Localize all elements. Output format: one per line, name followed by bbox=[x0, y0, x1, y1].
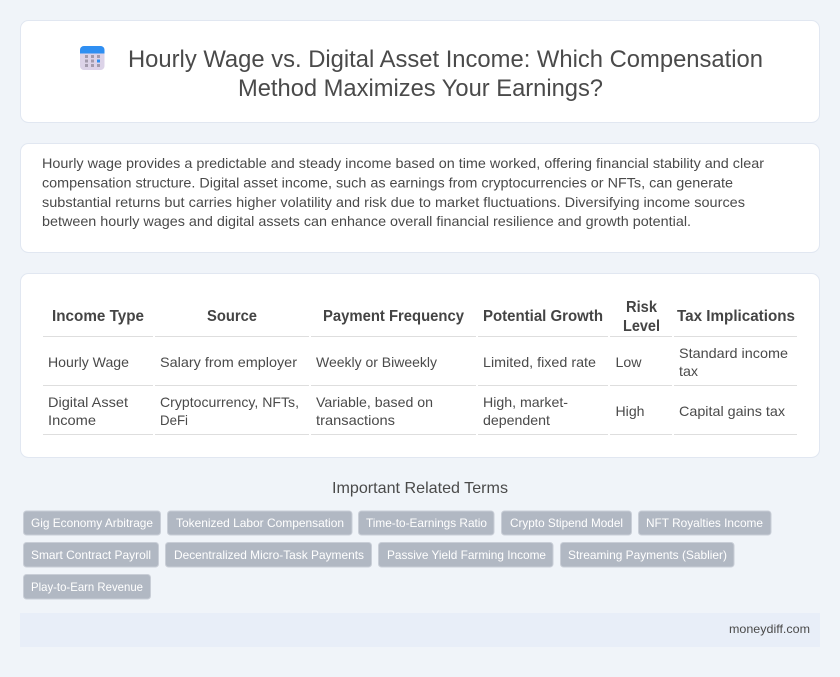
text block: summary: substantial returns but carries higher volatility and risk due to market fluctuations. Diversifying income sources bbox=[42, 194, 745, 210]
table row: digital asset income: Income bbox=[48, 412, 96, 428]
tag: smart contract payroll bbox=[24, 542, 158, 567]
tag: nft royalties income: NFT Royalties Income bbox=[646, 516, 763, 530]
tag: smart contract payroll: Smart Contract Payroll bbox=[31, 548, 151, 562]
table header row: Risk bbox=[626, 299, 657, 316]
text block: summary bbox=[42, 155, 764, 229]
table header row bbox=[52, 299, 795, 335]
tag: decentralized micro-task payments bbox=[166, 542, 372, 567]
table row: hourly wage: Hourly Wage bbox=[48, 354, 129, 370]
tag: time-to-earnings ratio bbox=[358, 511, 494, 535]
heading: important related terms: Important Related Terms bbox=[332, 480, 508, 497]
table row: digital asset income: transactions bbox=[316, 412, 395, 428]
tag: streaming payments: Streaming Payments (Sablier) bbox=[568, 548, 727, 562]
tag: passive yield farming income bbox=[378, 542, 553, 567]
title: Hourly Wage vs. Digital Asset Income: Which Compensation bbox=[128, 46, 763, 73]
tag: nft royalties income bbox=[638, 511, 771, 535]
tag: passive yield farming income: Passive Yield Farming Income bbox=[387, 548, 546, 562]
table row: digital asset income: DeFi bbox=[160, 412, 188, 428]
table row: digital asset income: Cryptocurrency, NFTs, bbox=[160, 394, 299, 410]
table row: hourly wage: Weekly or Biweekly bbox=[316, 354, 437, 370]
table header row: Income Type bbox=[52, 308, 144, 325]
table header row: Level bbox=[623, 318, 660, 335]
panel: comparison table bbox=[20, 274, 820, 458]
text block: summary: compensation structure. Digital asset income, such as earnings from cryptocurrencies or NFTs, can generate bbox=[42, 174, 733, 190]
table row: digital asset income: dependent bbox=[483, 412, 550, 428]
title bbox=[128, 46, 763, 102]
table row: hourly wage: Limited, fixed rate bbox=[483, 354, 596, 370]
tag: streaming payments bbox=[560, 542, 734, 567]
tag: crypto stipend model: Crypto Stipend Model bbox=[510, 516, 623, 530]
table row: digital asset income: Variable, based on bbox=[316, 394, 433, 410]
table header row: Payment Frequency bbox=[323, 308, 464, 325]
icon: calendar bbox=[80, 46, 104, 70]
table row: digital asset income: Capital gains tax bbox=[679, 403, 785, 419]
panel: summary paragraph bbox=[20, 144, 820, 252]
tag: gig economy arbitrage bbox=[24, 511, 160, 535]
tag: gig economy arbitrage: Gig Economy Arbitrage bbox=[31, 516, 153, 530]
tag: tokenized labor compensation: Tokenized Labor Compensation bbox=[176, 516, 344, 530]
footer bar: moneydiff.com bbox=[729, 622, 810, 636]
tag: time-to-earnings ratio: Time-to-Earnings Ratio bbox=[366, 516, 487, 530]
title: Method Maximizes Your Earnings? bbox=[238, 75, 603, 102]
tag: decentralized micro-task payments: Decentralized Micro-Task Payments bbox=[174, 548, 364, 562]
table row: digital asset income: Digital Asset bbox=[48, 394, 128, 410]
text block: summary: between hourly wages and digital assets can enhance overall financial resilience and growth potential. bbox=[42, 213, 691, 229]
table row: digital asset income bbox=[48, 394, 785, 428]
text block: summary: Hourly wage provides a predictable and steady income based on time worked, offering financial stability and clear bbox=[42, 155, 764, 171]
footer bar bbox=[20, 613, 820, 647]
table row: digital asset income: High bbox=[616, 403, 644, 419]
tag: play-to-earn revenue: Play-to-Earn Revenue bbox=[31, 580, 143, 594]
table row: hourly wage: Standard income bbox=[679, 345, 788, 361]
table header row: Source bbox=[207, 308, 257, 325]
table header row: Potential Growth bbox=[483, 308, 603, 325]
tag: play-to-earn revenue bbox=[24, 574, 150, 599]
table row: hourly wage: tax bbox=[679, 363, 698, 379]
table row: hourly wage: Low bbox=[616, 354, 642, 370]
tag: tokenized labor compensation bbox=[168, 511, 352, 535]
tag list: related terms bbox=[24, 511, 771, 599]
tag: crypto stipend model bbox=[502, 511, 632, 535]
table row: digital asset income: High, market- bbox=[483, 394, 568, 410]
panel: title card bbox=[20, 20, 820, 122]
table row: hourly wage bbox=[48, 345, 788, 379]
table header row: Tax Implications bbox=[677, 308, 795, 325]
table row: hourly wage: Salary from employer bbox=[160, 354, 297, 370]
